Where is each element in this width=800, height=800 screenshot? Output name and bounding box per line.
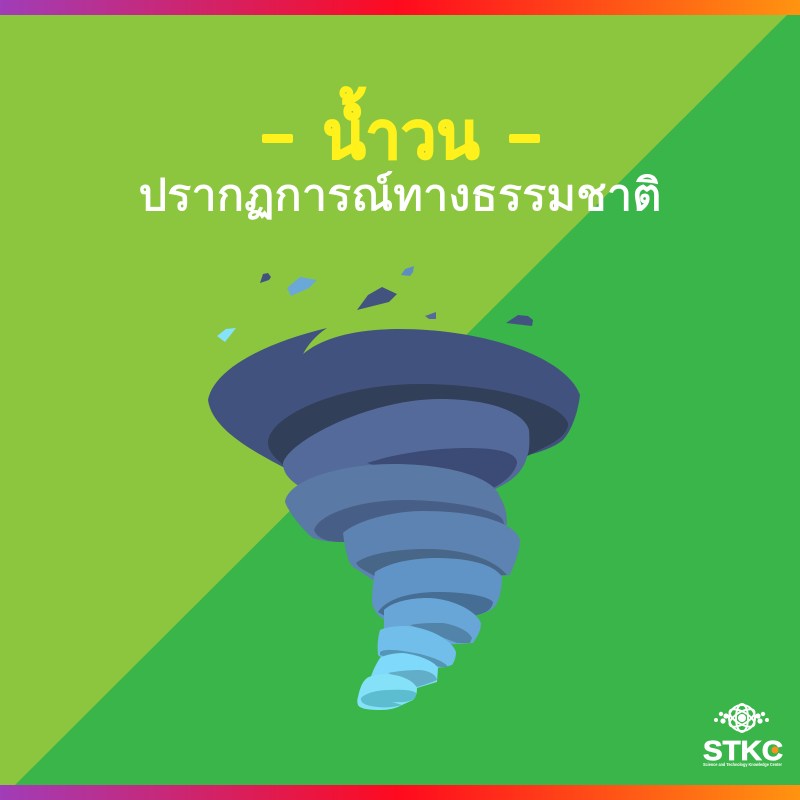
bottom gradient bar (0, 785, 800, 800)
tornado layer 9 dark inside (361, 690, 416, 707)
tornado layer 5 dark inside (378, 592, 493, 625)
title word: น้ำวน (322, 86, 480, 172)
logo: STKC (703, 704, 783, 767)
tornado layer 1 dark inside (268, 384, 568, 475)
tornado layer 3 dark inside (314, 500, 505, 542)
tornado layer 5 (372, 558, 502, 625)
tornado layer 6 (384, 598, 481, 645)
logo dots (714, 712, 769, 724)
title left dash (262, 134, 293, 143)
tornado layer 8 dark inside (388, 670, 437, 687)
subtitle: ปรากฏการณ์ทางธรรมชาติ (138, 171, 662, 220)
title (262, 86, 540, 172)
tornado layer 9 tip (357, 674, 417, 710)
logo wordmark: STKC (703, 735, 783, 766)
title right dash (509, 134, 540, 143)
logo orange dot (772, 746, 778, 754)
top gradient bar (0, 0, 800, 15)
tornado layer 7 (378, 626, 456, 672)
tornado layer 6 dark inside (410, 623, 472, 643)
logo atom icon (727, 704, 757, 732)
logo tagline: Science and Technology Knowledge Center (703, 762, 782, 767)
tornado layer 8 (370, 653, 438, 692)
tornado layer 4 dark inside (356, 549, 507, 580)
tornado layer 4 (343, 511, 520, 585)
icon: tornado (208, 266, 580, 710)
tornado layer 2 dark inside (367, 448, 517, 488)
flying debris (217, 266, 533, 342)
tornado layer 3 (285, 464, 507, 542)
tornado layer 7 dark inside (380, 650, 448, 667)
tornado layer 2 (283, 399, 529, 510)
tornado layer 1 top cloud (208, 328, 580, 500)
